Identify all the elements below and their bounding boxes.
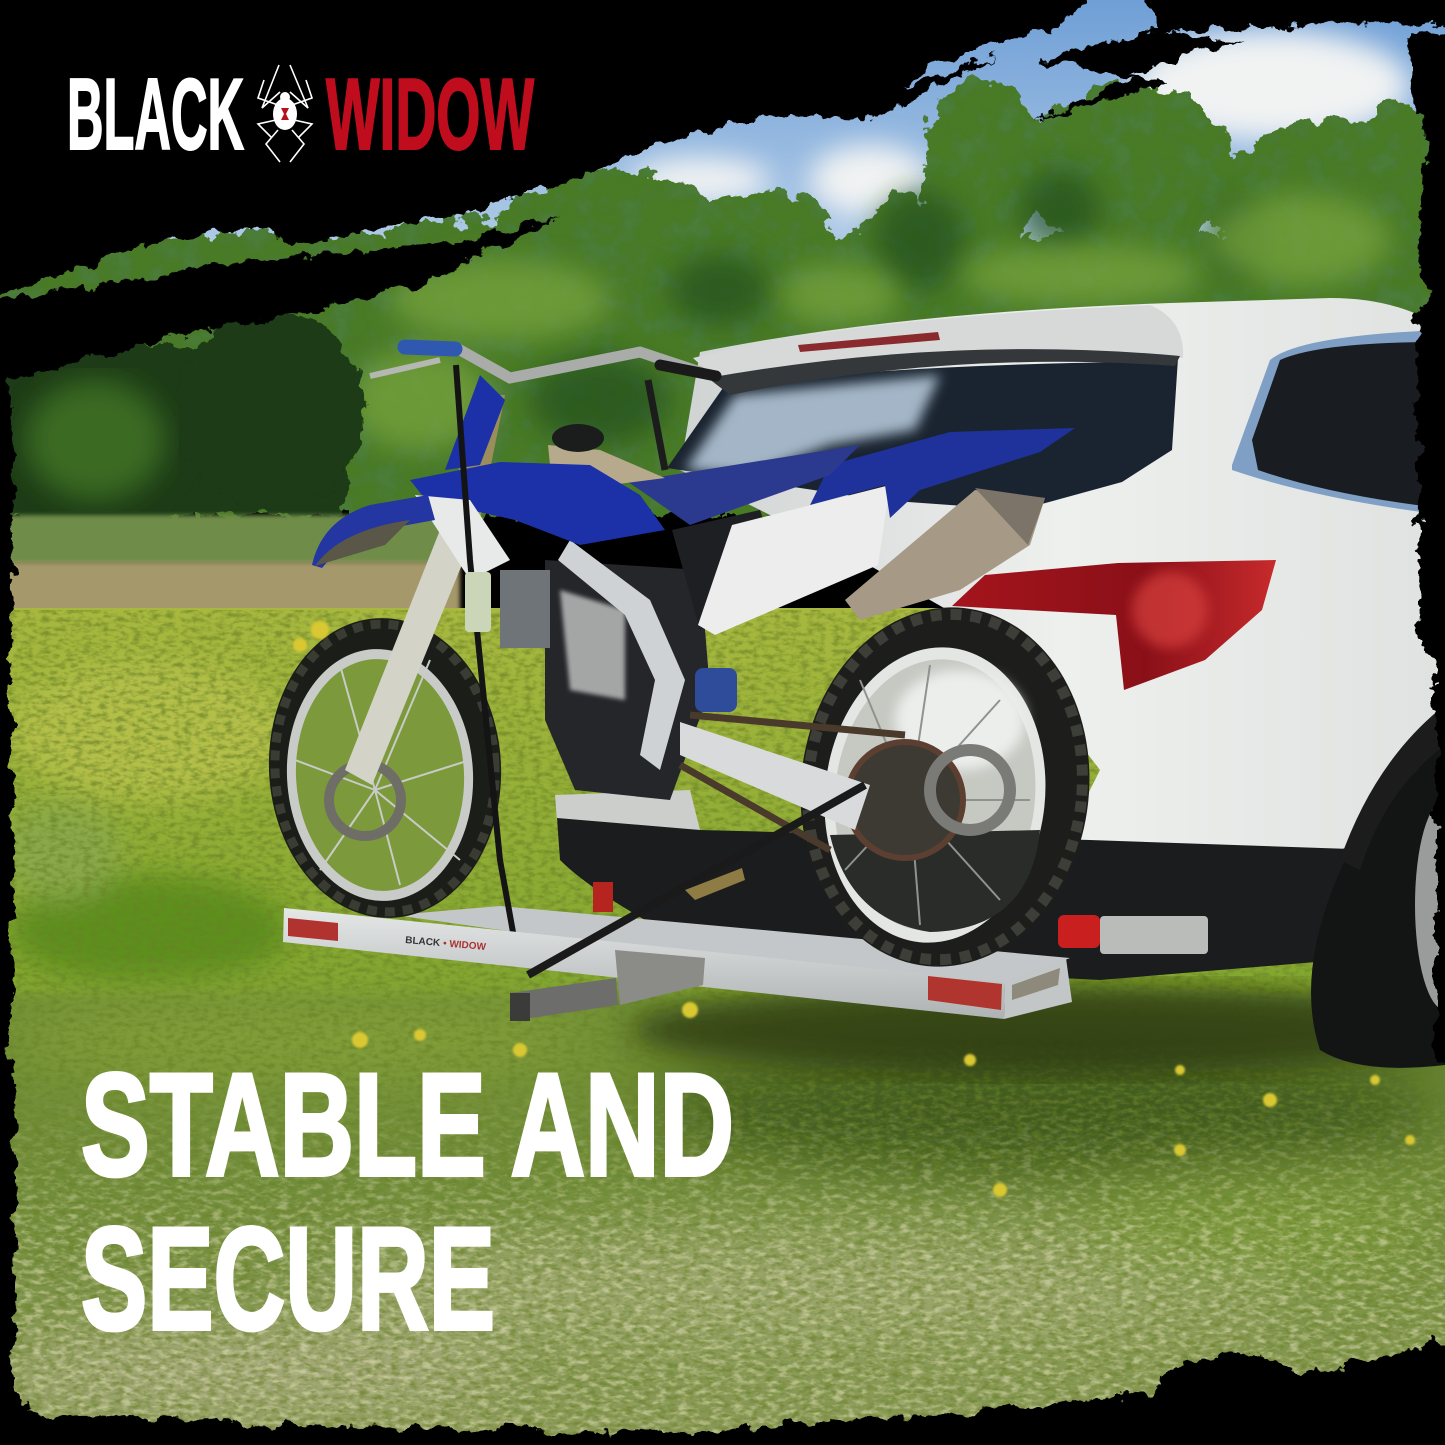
lower white bumper: [555, 790, 700, 830]
tie-down strap rear: [528, 785, 865, 975]
engine highlights: [560, 590, 625, 700]
front disc: [329, 764, 401, 836]
ratchet: [685, 868, 745, 900]
wheel arch: [1340, 705, 1445, 870]
brush streak top right: [1030, 0, 1445, 122]
forks: [345, 530, 472, 785]
logo word: BLACK: BLACK: [67, 59, 244, 171]
white shroud: [415, 495, 510, 580]
roof spoiler: [693, 305, 1183, 392]
rear wheel interior: [821, 649, 1049, 941]
seat: [595, 445, 860, 525]
lit foliage: [350, 195, 1390, 450]
blue number plate: [445, 375, 505, 470]
brake lever: [370, 360, 440, 376]
white SUV: [555, 298, 1445, 1068]
grass light texture: [0, 1080, 1445, 1445]
left reflector: [288, 918, 338, 941]
headline line 1: STABLE AND: [81, 1043, 734, 1206]
mid tree highlight: [25, 380, 165, 500]
hitch bar: [510, 978, 618, 1021]
brake light: [798, 332, 940, 352]
front tyre: [261, 612, 509, 924]
radiator: [500, 570, 550, 648]
logo word: WIDOW: WIDOW: [326, 59, 534, 171]
rear tyre knobs: [791, 601, 1099, 973]
front rim: [281, 644, 479, 906]
front wheel: [261, 612, 509, 924]
rack end: [1004, 958, 1072, 1019]
main banner: [0, 0, 1110, 300]
exhaust: [845, 490, 1045, 620]
rear window: [667, 358, 1178, 510]
torn left edge: [0, 360, 30, 1445]
spider legs: [258, 65, 312, 162]
foreground variation: [0, 1000, 1445, 1410]
fork upper: [445, 395, 505, 545]
rear wheel: [783, 593, 1107, 981]
side window: [1232, 330, 1445, 515]
front wheel spokes: [295, 660, 470, 885]
blue tank / shroud: [410, 462, 665, 545]
icon: spider: [258, 65, 312, 162]
motorcycle: [261, 345, 1107, 981]
grass variation: [0, 660, 290, 985]
spoiler underside: [708, 349, 1180, 395]
side window glass: [1252, 342, 1440, 508]
mid grass: [0, 608, 1445, 1018]
yellow wildflowers: [293, 621, 1415, 1197]
spokes: [845, 665, 1030, 925]
handlebars: [405, 345, 700, 378]
headline: [81, 1043, 734, 1360]
far meadow band: [0, 515, 460, 565]
torn bottom edge: [0, 1344, 1445, 1445]
right reflector: [928, 976, 1002, 1010]
number plate: [698, 485, 890, 635]
green tag: [465, 572, 491, 632]
sprocket and chain: [847, 742, 963, 858]
blue shock: [695, 668, 737, 712]
logo: [67, 59, 534, 171]
tie-down strap front: [456, 365, 518, 960]
left reflector: [593, 882, 613, 912]
tan field band: [0, 562, 460, 614]
fender underside: [315, 520, 410, 566]
rack top channel: [395, 906, 1070, 985]
reflector and reverse light: [1058, 915, 1100, 948]
rear rim: [810, 636, 1060, 954]
clouds: [630, 30, 1410, 215]
hitch end: [510, 993, 530, 1021]
frame: [558, 540, 685, 770]
foreground grass: [0, 995, 1445, 1445]
rear wheel: [1311, 740, 1445, 1068]
lower brush band: [0, 215, 560, 400]
sky: [0, 0, 1445, 320]
torn right edge: [1410, 25, 1445, 1080]
fuel tank tan seat: [548, 445, 665, 485]
rack front rail: [283, 908, 1005, 1019]
front interior: [290, 655, 470, 895]
headline line 2: SECURE: [81, 1197, 495, 1360]
tail light: [952, 560, 1276, 690]
tree shadows: [530, 170, 1270, 445]
spider body: [273, 98, 297, 130]
window sky reflection: [685, 375, 940, 475]
chain: [680, 715, 905, 850]
black grip: [660, 365, 716, 376]
engine: [545, 560, 710, 800]
rear tyre: [783, 593, 1107, 981]
hitch bracket: [615, 950, 705, 1005]
lower bumper black: [557, 818, 1380, 980]
dark tree mass left: [0, 310, 365, 550]
rim: [1415, 800, 1445, 1010]
exhaust tip: [975, 488, 1045, 545]
blue tail fender: [810, 428, 1075, 518]
swingarm: [680, 722, 870, 830]
spider head: [280, 92, 290, 102]
ground shadow under vehicle: [630, 985, 1445, 1075]
end opening: [1012, 968, 1060, 1000]
rear shroud dark: [672, 510, 790, 630]
hourglass: [281, 108, 289, 120]
brake disc: [930, 750, 1010, 830]
upper wheel light: [895, 670, 1025, 770]
reverse lamp: [1100, 916, 1208, 954]
blue grip: [405, 347, 455, 349]
gas cap: [552, 424, 604, 452]
far tree line: [0, 80, 1445, 515]
front fender: [312, 495, 435, 568]
front tyre knobs: [268, 618, 502, 918]
lower wheel dark: [830, 830, 1040, 932]
rack logo: BLACK• WIDOW: [405, 935, 487, 953]
aluminium rack: [283, 785, 1072, 1021]
grass dark texture: [0, 610, 1445, 1445]
handlebar strap: [648, 380, 665, 470]
car body: [680, 298, 1445, 850]
tail light highlight: [1132, 572, 1208, 648]
